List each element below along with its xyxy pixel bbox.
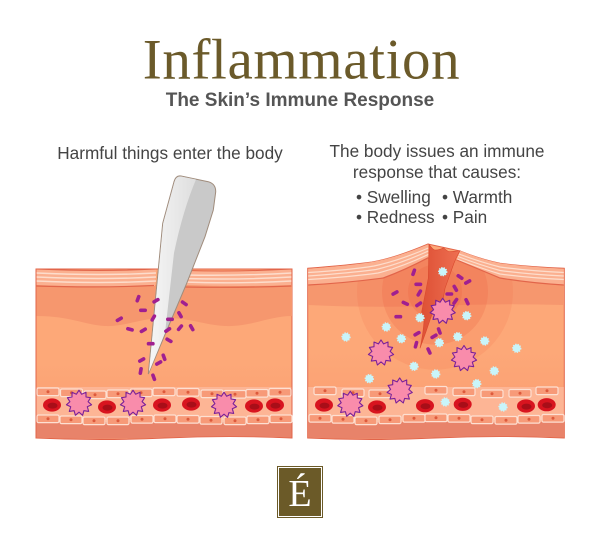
endothelial cells top row bbox=[314, 386, 558, 398]
panel: left skin cross-section bbox=[36, 176, 292, 440]
endothelial cells top row bbox=[37, 388, 291, 399]
blood vessel bbox=[36, 387, 292, 420]
blood vessel bbox=[308, 387, 564, 420]
symptom list: • Redness bbox=[356, 207, 435, 227]
white blood cells bbox=[342, 268, 521, 411]
left heading: Harmful things enter the body bbox=[57, 143, 283, 163]
epidermis bbox=[308, 244, 564, 285]
symptom list: • Swelling bbox=[356, 187, 431, 207]
bacteria bbox=[391, 268, 472, 355]
symptom list: • Pain bbox=[442, 207, 487, 227]
right heading: The body issues an immune bbox=[330, 141, 544, 161]
logo: É bbox=[288, 473, 312, 515]
red blood cells bbox=[43, 397, 284, 414]
symptom list bbox=[356, 187, 512, 227]
dermis layer bbox=[36, 285, 292, 326]
right heading: response that causes: bbox=[353, 162, 521, 182]
wound bbox=[420, 244, 460, 348]
epidermis bbox=[36, 269, 292, 287]
needle bbox=[148, 176, 216, 374]
skin base bbox=[36, 269, 292, 440]
endothelial cells bottom row bbox=[37, 415, 292, 425]
logo bbox=[277, 466, 323, 518]
title: Inflammation bbox=[143, 28, 460, 92]
dermis layer bbox=[308, 257, 564, 307]
panel: right skin cross-section bbox=[307, 244, 565, 440]
immune cells bbox=[338, 298, 477, 416]
bacteria bbox=[115, 294, 195, 382]
immune cells bbox=[66, 390, 237, 417]
subtitle: The Skin’s Immune Response bbox=[166, 90, 434, 111]
symptom list: • Warmth bbox=[442, 187, 512, 207]
red blood cells bbox=[315, 398, 556, 414]
inflammation rings bbox=[358, 258, 512, 370]
endothelial cells bottom row bbox=[309, 414, 564, 425]
skin base bbox=[308, 244, 564, 440]
right heading bbox=[330, 141, 544, 182]
